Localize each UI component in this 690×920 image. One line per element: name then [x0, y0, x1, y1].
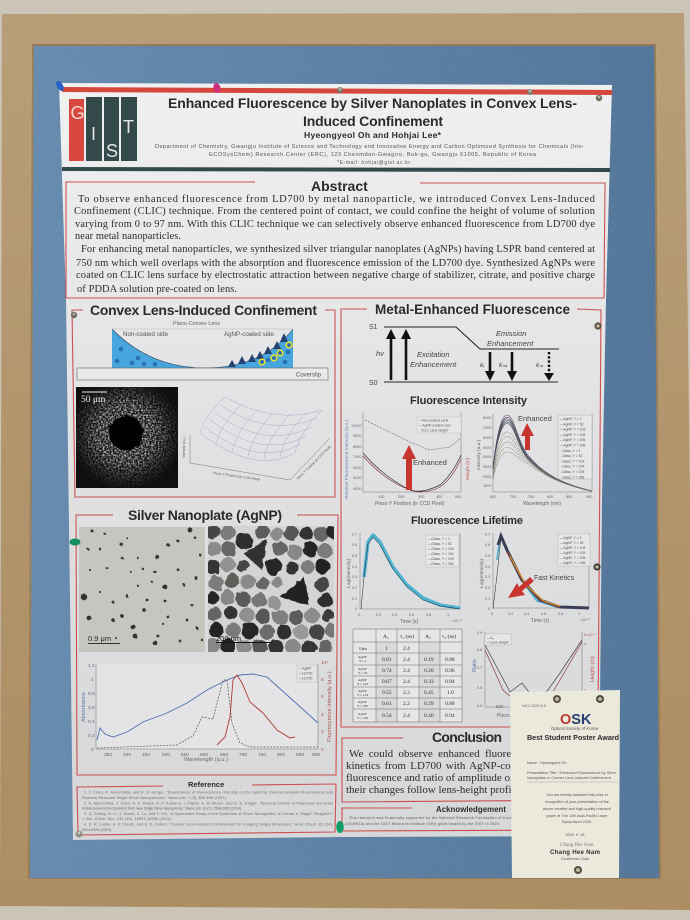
chart: absorbance and fluorescence spectra: 500 [162, 752, 170, 758]
award certificate [510, 690, 620, 878]
table: fit parameters: 0.94 [445, 713, 455, 719]
table: fit parameters: 2.4 [403, 657, 410, 663]
chart: intensity vs wavelength: —AgNP, Y = 154 [560, 433, 585, 437]
table: fit parameters: 0.45 [424, 690, 434, 696]
chart: glass lifetime decay: 0.2 [352, 586, 357, 590]
chart: intensity vs wavelength: 3000 [483, 465, 491, 469]
chart: intensity vs piezo position [344, 412, 471, 507]
chart: AgNP lifetime decay: —AgNP, Y = 1 [560, 536, 582, 540]
table: fit parameters: 0.19 [424, 657, 434, 663]
table: fit parameters: 2.4 [403, 679, 410, 685]
table: fit parameters: Y = 154 [357, 693, 368, 697]
authors: Hyeongyeol Oh and Hohjai Lee* [304, 130, 442, 140]
table: fit parameters: Y = 103 [357, 682, 368, 686]
award certificate: NO.2-2020-9-5 [522, 704, 546, 708]
affiliation: ECOSysChem) Research Center (ERC), 123 Cheomdan-Gwagiro, Buk-gu, Gwangju 61005, Republic of Korea [209, 152, 537, 158]
chart: glass lifetime decay: —Glass, Y = 256 [428, 562, 454, 566]
citation: You are hereby awarded this prize in [546, 793, 608, 797]
table: fit parameters: 2.4 [403, 646, 410, 652]
table: fit parameters: AgNP [358, 655, 367, 659]
chart: intensity vs wavelength: 700 [510, 495, 516, 499]
chart: intensity vs piezo position: 12000 [351, 424, 362, 428]
chart: intensity vs wavelength: - Glass, Y = 205 [560, 470, 584, 474]
citation [543, 793, 611, 837]
affiliation [155, 144, 584, 166]
chart: intensity vs wavelength: 2000 [483, 475, 491, 479]
energy level diagram: kₘᵣ [499, 362, 508, 369]
chart: glass lifetime decay: 0.4 [392, 613, 397, 617]
reference list: 4. S. R. Leslie, A. P. Fields, and A. E. Cohen, "Convex Lens-Induced Confinement for Imaging Single Molecules," Anal. Chem. 82 (14), [84, 822, 333, 826]
chart: glass lifetime decay: Time (s) [400, 619, 418, 625]
chart: AgNP lifetime decay: 0.3 [485, 575, 490, 579]
table: fit parameters: 0.96 [445, 668, 455, 674]
chart: absorbance and fluorescence spectra: 550 [181, 752, 189, 758]
energy level diagram: kₙᵣ [536, 362, 544, 369]
chart: absorbance and fluorescence spectra: 800 [277, 752, 285, 758]
abstract text [74, 194, 596, 295]
chart: intensity vs piezo position: 8000 [353, 445, 361, 449]
chart: intensity vs piezo position: Height (m) [465, 457, 471, 480]
table: fit parameters: 0.54 [382, 713, 392, 719]
table: fit parameters: Y = 52 [358, 671, 368, 675]
chart: absorbance and fluorescence spectra: 6 [321, 694, 324, 700]
diagram: plano-convex lens: AgNP-coated side [224, 331, 274, 338]
chart: absorbance and fluorescence spectra: 0.4 [88, 719, 95, 725]
chart: glass lifetime decay: —Glass, Y = 52 [428, 542, 452, 546]
abstract text: of PDDA solution pre-coated on lens. [77, 284, 237, 295]
heading: abstract: Abstract [311, 178, 368, 194]
table: fit parameters: Y = 256 [357, 716, 368, 720]
abstract text: 750 nm which well overlaps with the absorption and fluorescence emission of the LD700 dye. Synthesized AgNPs were [76, 258, 595, 269]
table: fit parameters: A₁ [383, 634, 389, 640]
chart: glass lifetime decay: 0.4 [352, 565, 357, 569]
affiliation: Department of Chemistry, Gwangju Institute of Science and Technology and Innovative Energy and Carbon Optimized Synthesis for Chemicals (Inn- [155, 144, 584, 150]
chart: intensity vs wavelength: —AgNP, Y = 103 [560, 428, 585, 432]
chart: absorbance and fluorescence spectra: 0 [321, 747, 324, 753]
chart: absorbance and fluorescence spectra: 2 [321, 729, 324, 735]
chart: intensity vs wavelength: —AgNP, Y = 52 [560, 422, 584, 426]
chart: glass lifetime decay: —Glass, Y = 103 [428, 547, 454, 551]
3D surface plot: Intensity (a.u.) [182, 437, 186, 458]
chart: glass lifetime decay: 0.3 [352, 575, 357, 579]
chart: ratio and lens height: Ratio [472, 659, 478, 672]
chart: ratio and lens height: Piezo [497, 713, 510, 719]
TEM image: low magnification: 0.9 μm [88, 634, 111, 643]
logo: OSK [551, 712, 599, 731]
chart: ratio and lens height: 0.7 [477, 666, 482, 670]
TEM image: low magnification [79, 527, 205, 652]
chart: intensity vs wavelength: 650 [490, 495, 496, 499]
chart: absorbance and fluorescence spectra [81, 660, 333, 763]
chart: AgNP lifetime decay: 0.6 [485, 543, 490, 547]
abstract text: varying from 0 to 97 nm. With this CLIC technique we can selectively observe enhanced fluorescence from LD700 dye [75, 219, 595, 230]
table: fit parameters: 0.67 [382, 679, 392, 685]
chart: glass lifetime decay: —Glass, Y = 154 [428, 552, 454, 556]
coverslip [77, 368, 328, 380]
chart: glass lifetime decay: ×10⁻⁸ [452, 619, 462, 623]
chart: intensity vs wavelength: 6000 [483, 436, 491, 440]
chart: AgNP lifetime decay: 0.1 [485, 597, 490, 601]
chart: intensity vs wavelength: 7000 [483, 426, 491, 430]
chart: intensity vs wavelength: Wavelength (nm) [523, 501, 561, 507]
energy level diagram: kᵣ [480, 362, 485, 369]
chart: intensity vs wavelength: - Glass, Y = 154 [560, 465, 584, 469]
chart: glass lifetime decay: 0 [358, 613, 360, 617]
signature: Conference Chair [561, 857, 590, 861]
abstract text: For enhancing metal nanoparticles, we synthesized silver triangular nanoplates (AgNPs) having LSPR band centered at [81, 244, 595, 255]
reference list: 6224-6229 (2010). [82, 828, 112, 832]
panel: acknowledgement [342, 805, 600, 831]
chart: absorbance and fluorescence spectra: —AgNP [299, 666, 312, 670]
signature [550, 843, 600, 861]
chart: glass lifetime decay: 0 [355, 607, 357, 611]
panel: silver nanoplate [76, 507, 340, 775]
chart: intensity vs wavelength: —AgNP, Y = 205 [560, 438, 585, 442]
energy level diagram [369, 324, 559, 387]
diagram: plano-convex lens [112, 321, 293, 368]
chart: intensity vs piezo position: Piezo Y Position (in CCD Pixel) [375, 501, 445, 507]
chart: intensity vs piezo position: 200 [398, 495, 404, 499]
chart: absorbance and fluorescence spectra: 900 [312, 752, 320, 758]
table: fit parameters: 0.74 [382, 668, 392, 674]
chart: intensity vs wavelength: 900 [586, 495, 592, 499]
chart: intensity vs piezo position: 6000 [353, 466, 361, 470]
chart: absorbance and fluorescence spectra: 700 [239, 752, 247, 758]
energy level diagram: Emission [496, 329, 526, 338]
table: fit parameters [353, 629, 462, 722]
fluorescence micrograph: 50 μm [81, 395, 106, 405]
chart: AgNP lifetime decay: Log(Intensity) [479, 559, 485, 588]
chart: AgNP lifetime decay: 0.2 [508, 612, 513, 616]
abstract text: Confinement (CLIC) technique. From the centered point of contact, we could confine the height of volume of solution [74, 206, 596, 217]
chart: intensity vs piezo position: Enhanced [413, 458, 447, 467]
table: fit parameters: 0.33 [424, 679, 434, 685]
reference list: J. Am. Chem. Soc. 133 (46), 18931-18939 (2011). [82, 817, 172, 821]
chart: glass lifetime decay: —Glass, Y = 205 [428, 557, 454, 561]
table: fit parameters: AgNP [358, 712, 367, 716]
chart: ratio and lens height: —Lens Height [487, 640, 509, 644]
acknowledgement text: (2019R1A) and the GIST Research Institute (GRI) grant funded by the GIST in 2020. [345, 822, 500, 826]
chart: AgNP lifetime decay: Fast Kinetics [534, 575, 575, 582]
table: fit parameters: 0.94 [445, 679, 455, 685]
chart: absorbance and fluorescence spectra: Wavelength (a.u.) [184, 757, 228, 763]
table: fit parameters: 2.3 [403, 690, 410, 696]
3D surface plot [182, 397, 332, 482]
chart: absorbance and fluorescence spectra: 850 [296, 752, 304, 758]
heading: conclusion: Conclusion [432, 729, 502, 745]
chart: ratio and lens height: Height (m) [590, 656, 596, 682]
energy level diagram: Enhancement [487, 339, 534, 348]
table: fit parameters: τ₁ (ns) [400, 633, 414, 640]
chart: ratio and lens height: 5×10⁻⁷ [584, 633, 597, 637]
conclusion text: fluorescence and ratio of amplitude of AgNP [346, 772, 543, 784]
chart: AgNP lifetime decay: —AgNP, Y = 103 [560, 546, 585, 550]
chart: AgNP lifetime decay: —AgNP, Y = 256 [560, 561, 585, 565]
signature: Chang Hee Nam [560, 843, 594, 848]
chart: ratio and lens height: 0.9 [477, 631, 482, 635]
chart: absorbance and fluorescence spectra: 10⁴ [321, 660, 328, 666]
title [168, 95, 577, 129]
chart: intensity vs piezo position: 100 [378, 495, 384, 499]
logo: GIST: G [70, 103, 85, 123]
acknowledgement text: This research was financially supported by the National Research Foundation of Korea [349, 816, 514, 820]
heading: fluorescence lifetime: Fluorescence Lifetime [411, 515, 523, 527]
reference list [82, 790, 334, 832]
chart: intensity vs wavelength: Enhanced [518, 414, 552, 423]
chart: glass lifetime decay: 0.5 [352, 554, 357, 558]
chart: absorbance and fluorescence spectra: —LD700 [299, 672, 312, 676]
chart: absorbance and fluorescence spectra: 650 [220, 752, 228, 758]
table: fit parameters: AgNP [358, 678, 367, 682]
coverslip: Coverslip [296, 372, 322, 378]
reference list: Plasmon Resonant Single Silver Nanoparticles," Nano Lett. 7 (3), 690-696 (2007). [82, 796, 227, 800]
chart: intensity vs wavelength: - Glass, Y = 1 [560, 449, 581, 453]
chart: ratio and lens height: 0.5 [477, 704, 482, 708]
table: fit parameters: 0.26 [424, 668, 434, 674]
chart: AgNP lifetime decay: 0.8 [558, 612, 563, 616]
title: Enhanced Fluorescence by Silver Nanoplates in Convex Lens- [168, 95, 577, 111]
table: fit parameters: 0.88 [445, 657, 455, 663]
recipient details: Presentation Title : Enhanced Fluorescence by Silver [527, 771, 617, 775]
citation: 2020. 9. 18 [565, 833, 585, 837]
chart: intensity vs piezo position: 400 [436, 495, 442, 499]
conclusion text: kinetics from LD700 with AgNP-coated lens. [346, 760, 554, 772]
logo: GIST: T [123, 117, 134, 137]
header band [62, 87, 612, 172]
chart: intensity vs wavelength [476, 414, 592, 507]
title: Induced Confinement [303, 113, 443, 129]
chart: intensity vs wavelength: —AgNP, Y = 1 [560, 417, 582, 421]
chart: glass lifetime decay: 0.6 [352, 543, 357, 547]
table: fit parameters: Y = 205 [357, 704, 368, 708]
logo: OSK: Optical Society of Korea [551, 726, 599, 731]
fluorescence micrograph [76, 387, 178, 488]
chart: absorbance and fluorescence spectra: 0 [91, 747, 94, 753]
chart: intensity vs wavelength: 5000 [483, 446, 491, 450]
table: fit parameters: 0.88 [445, 701, 455, 707]
energy level diagram: S1 [369, 324, 378, 331]
chart: intensity vs piezo position: - CLIC Lens Height [419, 428, 448, 432]
logo: GIST: I [91, 124, 96, 144]
table: fit parameters: Y = 1 [359, 659, 367, 663]
chart: glass lifetime decay: 0.2 [376, 613, 381, 617]
panel: metal-enhanced fluorescence [341, 302, 601, 727]
panel: convex lens-induced confinement [72, 302, 335, 497]
citation: recognition of your presentation of the [545, 800, 609, 804]
energy level diagram: Excitation [417, 350, 450, 359]
chart: ratio and lens height: 4 [584, 642, 586, 646]
chart: intensity vs wavelength: 1000 [483, 484, 491, 488]
poster [59, 83, 612, 840]
acknowledgement text [345, 816, 514, 826]
chart: absorbance and fluorescence spectra: 600 [200, 752, 208, 758]
logo: GIST [69, 97, 137, 161]
chart: intensity vs wavelength: 800 [547, 495, 553, 499]
signature: Chang Hee Nam [550, 849, 600, 856]
chart: intensity vs wavelength: 4000 [483, 455, 491, 459]
chart: intensity vs wavelength: 850 [566, 495, 572, 499]
recipient details [527, 761, 618, 782]
3D surface plot: Piezo X Position (in CCD Pixel) [213, 471, 260, 482]
chart: glass lifetime decay: 0.7 [352, 532, 357, 536]
table: fit parameters: AgNP [358, 667, 367, 671]
chart: glass lifetime decay: 0.6 [409, 613, 414, 617]
chart: intensity vs piezo position: 7000 [353, 455, 361, 459]
chart: AgNP lifetime decay: —AgNP, Y = 52 [560, 541, 584, 545]
table: fit parameters: A₂ [425, 634, 431, 640]
panel: abstract [66, 178, 605, 298]
table: fit parameters: Glass [359, 647, 368, 651]
energy level diagram: S0 [369, 380, 378, 387]
table: fit parameters: 0.55 [382, 690, 392, 696]
chart: intensity vs wavelength: - Glass, Y = 103 [560, 459, 584, 463]
chart: absorbance and fluorescence spectra: 0.2 [88, 733, 95, 739]
chart: AgNP lifetime decay: 0.2 [485, 586, 490, 590]
chart: glass lifetime decay: 0.8 [426, 613, 431, 617]
chart: absorbance and fluorescence spectra: 750 [258, 752, 266, 758]
chart: absorbance and fluorescence spectra: 1 [91, 677, 94, 683]
TEM image: high magnification: 200 nm [216, 634, 241, 643]
chart: absorbance and fluorescence spectra: 400 [123, 752, 131, 758]
chart: AgNP lifetime decay: Time (s) [531, 618, 549, 624]
pins [55, 80, 604, 874]
table: fit parameters: 1 [385, 646, 388, 652]
conclusion text: We could observe enhanced fluorescence and [349, 748, 562, 760]
chart: absorbance and fluorescence spectra: 8 [321, 677, 324, 683]
table: fit parameters: 1.0 [447, 690, 454, 696]
chart: absorbance and fluorescence spectra: Fluorescence Intensity (a.u.) [327, 671, 333, 742]
table: fit parameters: AgNP [358, 689, 367, 693]
chart: glass lifetime decay: Log(Intensity) [346, 559, 352, 588]
chart: ratio and lens height: 0.6 [477, 686, 482, 690]
abstract text: coated on CLIC lens surface by electrostatic attraction between negative charge of stabilizer, citrate, and positive charge [76, 270, 595, 281]
chart: AgNP lifetime decay: 0 [488, 607, 490, 611]
chart: AgNP lifetime decay: —AgNP, Y = 154 [560, 551, 585, 555]
table: fit parameters: 2.4 [403, 668, 410, 674]
table: fit parameters: τ₂ (ns) [442, 633, 456, 640]
logo: OSK: OSK [560, 712, 592, 728]
table: fit parameters: 0.46 [424, 713, 434, 719]
affiliation: *E-mail: hohjai@gist.ac.kr [337, 160, 410, 166]
chart: absorbance and fluorescence spectra: Absorbance [81, 692, 87, 722]
award title: Best Student Poster Award [527, 733, 619, 742]
chart: intensity vs piezo position: 300 [418, 495, 424, 499]
logo: GIST: S [106, 141, 118, 161]
citation: paper at The 12th Asia-Pacific Laser [546, 814, 608, 818]
TEM image: high magnification [206, 524, 340, 656]
chart: absorbance and fluorescence spectra: —LD700 [299, 676, 312, 680]
chart: AgNP lifetime decay: —AgNP, Y = 205 [560, 556, 585, 560]
energy level diagram: hv [376, 349, 385, 358]
citation: above creative and high-quality research [543, 807, 611, 811]
chart: intensity vs piezo position: 5000 [353, 476, 361, 480]
table: fit parameters: 2.2 [403, 701, 410, 707]
chart: intensity vs piezo position: Relative Fluorescence Intensity (a.u.) [344, 419, 350, 499]
chart: intensity vs wavelength: Intensity (a.u.) [476, 439, 482, 470]
reference list: 2. K. Munechika, Y. Chen, A. F. Tillack, A. P. Kulkarni, I. Plante, A. M. Munro, and D. S. Ginger, "Spectral Control of Plasmonic Emission [84, 802, 333, 806]
conclusion text: their changes follow lens-height profile. [346, 784, 523, 796]
chart: AgNP lifetime decay [479, 532, 590, 624]
chart: ratio and lens height: 2 [584, 689, 586, 693]
reference list: 3. Q. Zhang, N. Li, J. Goebl, Z. Lu, and Y. Yin, "A Systematic Study of the Synthesis of Silver Nanoplates: Is Citrate a "Magic" Reagent?" [84, 812, 334, 816]
chart: absorbance and fluorescence spectra: 0.6 [88, 705, 95, 711]
energy level diagram: Enhancement [410, 360, 457, 369]
chart: glass lifetime decay: 0.1 [352, 597, 357, 601]
table: fit parameters: 0.81 [382, 657, 392, 663]
abstract text: near metal nanoparticles. [75, 231, 181, 242]
reference list: Enhancement from Quantum Dots near Single Silver Nanoprisms," Nano Lett. 10 (7), 2598-2603 (2010). [82, 806, 242, 810]
chart: AgNP lifetime decay: 0.5 [485, 554, 490, 558]
heading: fluorescence intensity: Fluorescence Intensity [410, 395, 528, 407]
table: fit parameters: 0.61 [382, 701, 392, 707]
heading: CLIC: Convex Lens-Induced Confinement [90, 302, 317, 318]
chart: intensity vs wavelength: - Glass, Y = 256 [560, 475, 584, 479]
citation: Symposium 2020. [562, 820, 592, 824]
chart: absorbance and fluorescence spectra: 1.2 [88, 663, 95, 669]
chart: intensity vs wavelength: 8000 [483, 416, 491, 420]
chart: AgNP lifetime decay: 0 [491, 612, 493, 616]
heading: silver nanoplate: Silver Nanoplate (AgNP) [128, 507, 282, 523]
chart: intensity vs piezo position: —AgNP-coated Lens [419, 424, 451, 428]
chart: absorbance and fluorescence spectra: 0.8 [88, 691, 95, 697]
chart: ratio and lens height: —A₁ [487, 636, 495, 640]
heading: acknowledgement: Acknowledgement [436, 805, 506, 814]
abstract text: To observe enhanced fluorescence from LD700 by metal nanoparticle, we introduced Convex Lens-Induced [78, 194, 596, 205]
chart: intensity vs wavelength: - Glass, Y = 52 [560, 454, 583, 458]
chart: intensity vs piezo position: —Non-coated Lens [419, 418, 449, 422]
chart: AgNP lifetime decay: 1 [578, 612, 580, 616]
chart: ratio and lens height: 0.8 [477, 648, 482, 652]
chart: absorbance and fluorescence spectra: 4 [321, 712, 324, 718]
chart: AgNP lifetime decay: 0.6 [541, 612, 546, 616]
table: fit parameters: AgNP [358, 700, 367, 704]
chart: glass lifetime decay: 1 [447, 613, 449, 617]
diagram: plano-convex lens: Non-coated side [123, 331, 169, 338]
recipient details: Nanoplates in Convex Lens-Induced Confinement [527, 776, 612, 780]
reference list: 1. Y. Chen, K. Munechika, and D. S. Ginger, "Dependence of Fluorescence Intensity on the Spectral Overlap between Fluorophores and [84, 790, 333, 794]
chart: intensity vs piezo position: 9000 [353, 434, 361, 438]
heading: reference: Reference [188, 780, 224, 789]
chart: AgNP lifetime decay: 0.7 [485, 532, 490, 536]
chart: absorbance and fluorescence spectra: 350 [104, 752, 112, 758]
chart: AgNP lifetime decay: ×10⁻⁸ [580, 618, 590, 622]
recipient details: Name : Hyeongyeol Oh [527, 761, 566, 765]
chart: ratio and lens height: 500 [496, 704, 504, 709]
table: fit parameters: 2.4 [403, 713, 410, 719]
chart: AgNP lifetime decay: 0.4 [524, 612, 529, 616]
chart: AgNP lifetime decay: 0.4 [485, 565, 490, 569]
chart: glass lifetime decay: —Glass, Y = 1 [428, 537, 450, 541]
chart: glass lifetime decay [346, 532, 462, 625]
conclusion text [346, 748, 562, 796]
chart: intensity vs piezo position: 4000 [353, 487, 361, 491]
chart: intensity vs piezo position: 500 [455, 495, 461, 499]
panel: reference [77, 780, 336, 835]
chart: ratio and lens height [472, 631, 597, 719]
panel: conclusion [342, 729, 600, 802]
chart: intensity vs wavelength: 750 [528, 495, 534, 499]
heading: metal-enhanced fluorescence: Metal-Enhanced Fluorescence [375, 302, 570, 317]
chart: intensity vs wavelength: —AgNP, Y = 256 [560, 444, 585, 448]
diagram: plano-convex lens: Plano-Convex Lens [173, 321, 220, 327]
3D surface plot: Piezo Y Position (in CCD Pixel) [296, 445, 332, 481]
table: fit parameters: 0.39 [424, 701, 434, 707]
chart: absorbance and fluorescence spectra: 450 [142, 752, 150, 758]
